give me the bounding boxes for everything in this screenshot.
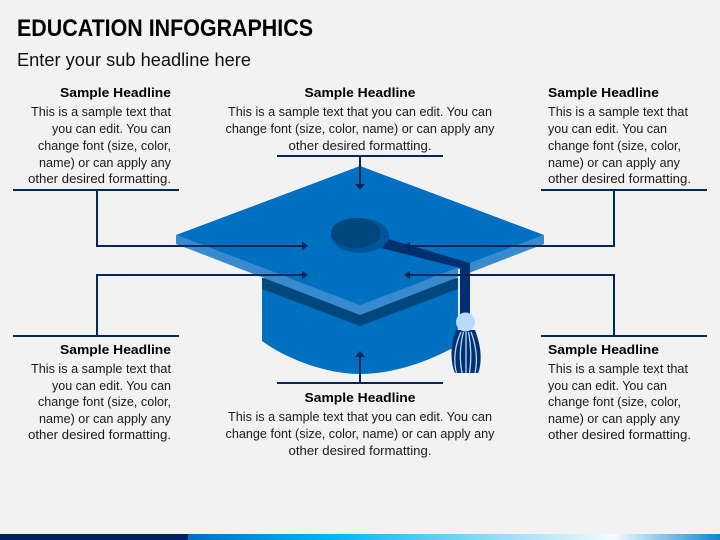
text block: lower left: change font (size, color, bbox=[38, 395, 171, 409]
text block: bottom center: change font (size, color, name) or can apply any bbox=[226, 427, 495, 441]
text block: lower left: you can edit. You can bbox=[52, 379, 171, 393]
text block: upper left: Sample Headline bbox=[60, 85, 171, 100]
text block: top center: This is a sample text that you can edit. You can bbox=[228, 105, 492, 119]
button bbox=[331, 218, 389, 253]
connector: top bbox=[277, 156, 443, 190]
text block: lower left: other desired formatting. bbox=[28, 428, 171, 442]
text block: lower left: name) or can apply any bbox=[39, 412, 172, 426]
text block: lower left: Sample Headline bbox=[60, 342, 171, 357]
text block: upper right: name) or can apply any bbox=[548, 156, 681, 170]
tassel cord bbox=[381, 238, 470, 316]
text block: upper right: change font (size, color, bbox=[548, 139, 681, 153]
text block: bottom center: This is a sample text that you can edit. You can bbox=[228, 410, 492, 424]
text block: upper right bbox=[548, 85, 691, 186]
text block: lower left bbox=[28, 342, 172, 442]
text block: bottom center: other desired formatting. bbox=[288, 444, 432, 458]
text block: bottom center: Sample Headline bbox=[304, 390, 416, 405]
text block: upper left bbox=[28, 85, 172, 186]
board top bbox=[176, 166, 544, 305]
text block: top center bbox=[226, 85, 495, 153]
text block: lower right: This is a sample text that bbox=[548, 362, 689, 376]
title: EDUCATION INFOGRAPHICS bbox=[17, 15, 313, 42]
text block: upper left: This is a sample text that bbox=[31, 105, 172, 119]
connector: bottom bbox=[277, 351, 443, 383]
connector: lower left bbox=[13, 270, 308, 336]
connector: lower right bbox=[404, 270, 707, 336]
footer bar bbox=[0, 534, 720, 540]
text block: lower right: name) or can apply any bbox=[548, 412, 681, 426]
text block: lower right: Sample Headline bbox=[548, 342, 659, 357]
tassel bbox=[452, 312, 481, 373]
text block: bottom center bbox=[226, 390, 495, 458]
text block: upper left: other desired formatting. bbox=[28, 172, 171, 186]
text block: upper left: name) or can apply any bbox=[39, 156, 172, 170]
text block: lower right: change font (size, color, bbox=[548, 395, 681, 409]
text block: upper right: Sample Headline bbox=[548, 85, 659, 100]
cap body bbox=[262, 278, 458, 374]
text block: upper right: This is a sample text that bbox=[548, 105, 689, 119]
text block: upper right: other desired formatting. bbox=[548, 172, 691, 186]
text block: upper left: change font (size, color, bbox=[38, 139, 171, 153]
cap dark band bbox=[262, 278, 458, 326]
text block: top center: change font (size, color, name) or can apply any bbox=[226, 122, 495, 136]
connector: upper right bbox=[404, 190, 707, 250]
text block: upper left: you can edit. You can bbox=[52, 122, 171, 136]
subtitle: Enter your sub headline here bbox=[17, 50, 251, 70]
connector: upper left bbox=[13, 190, 308, 250]
text block: lower left: This is a sample text that bbox=[31, 362, 172, 376]
text block: lower right: other desired formatting. bbox=[548, 428, 691, 442]
text block: top center: Sample Headline bbox=[304, 85, 416, 100]
text block: upper right: you can edit. You can bbox=[548, 122, 667, 136]
graduation cap bbox=[176, 166, 544, 374]
text block: lower right bbox=[548, 342, 691, 442]
board edge bbox=[176, 235, 544, 315]
text block: lower right: you can edit. You can bbox=[548, 379, 667, 393]
text block: top center: other desired formatting. bbox=[288, 139, 432, 153]
